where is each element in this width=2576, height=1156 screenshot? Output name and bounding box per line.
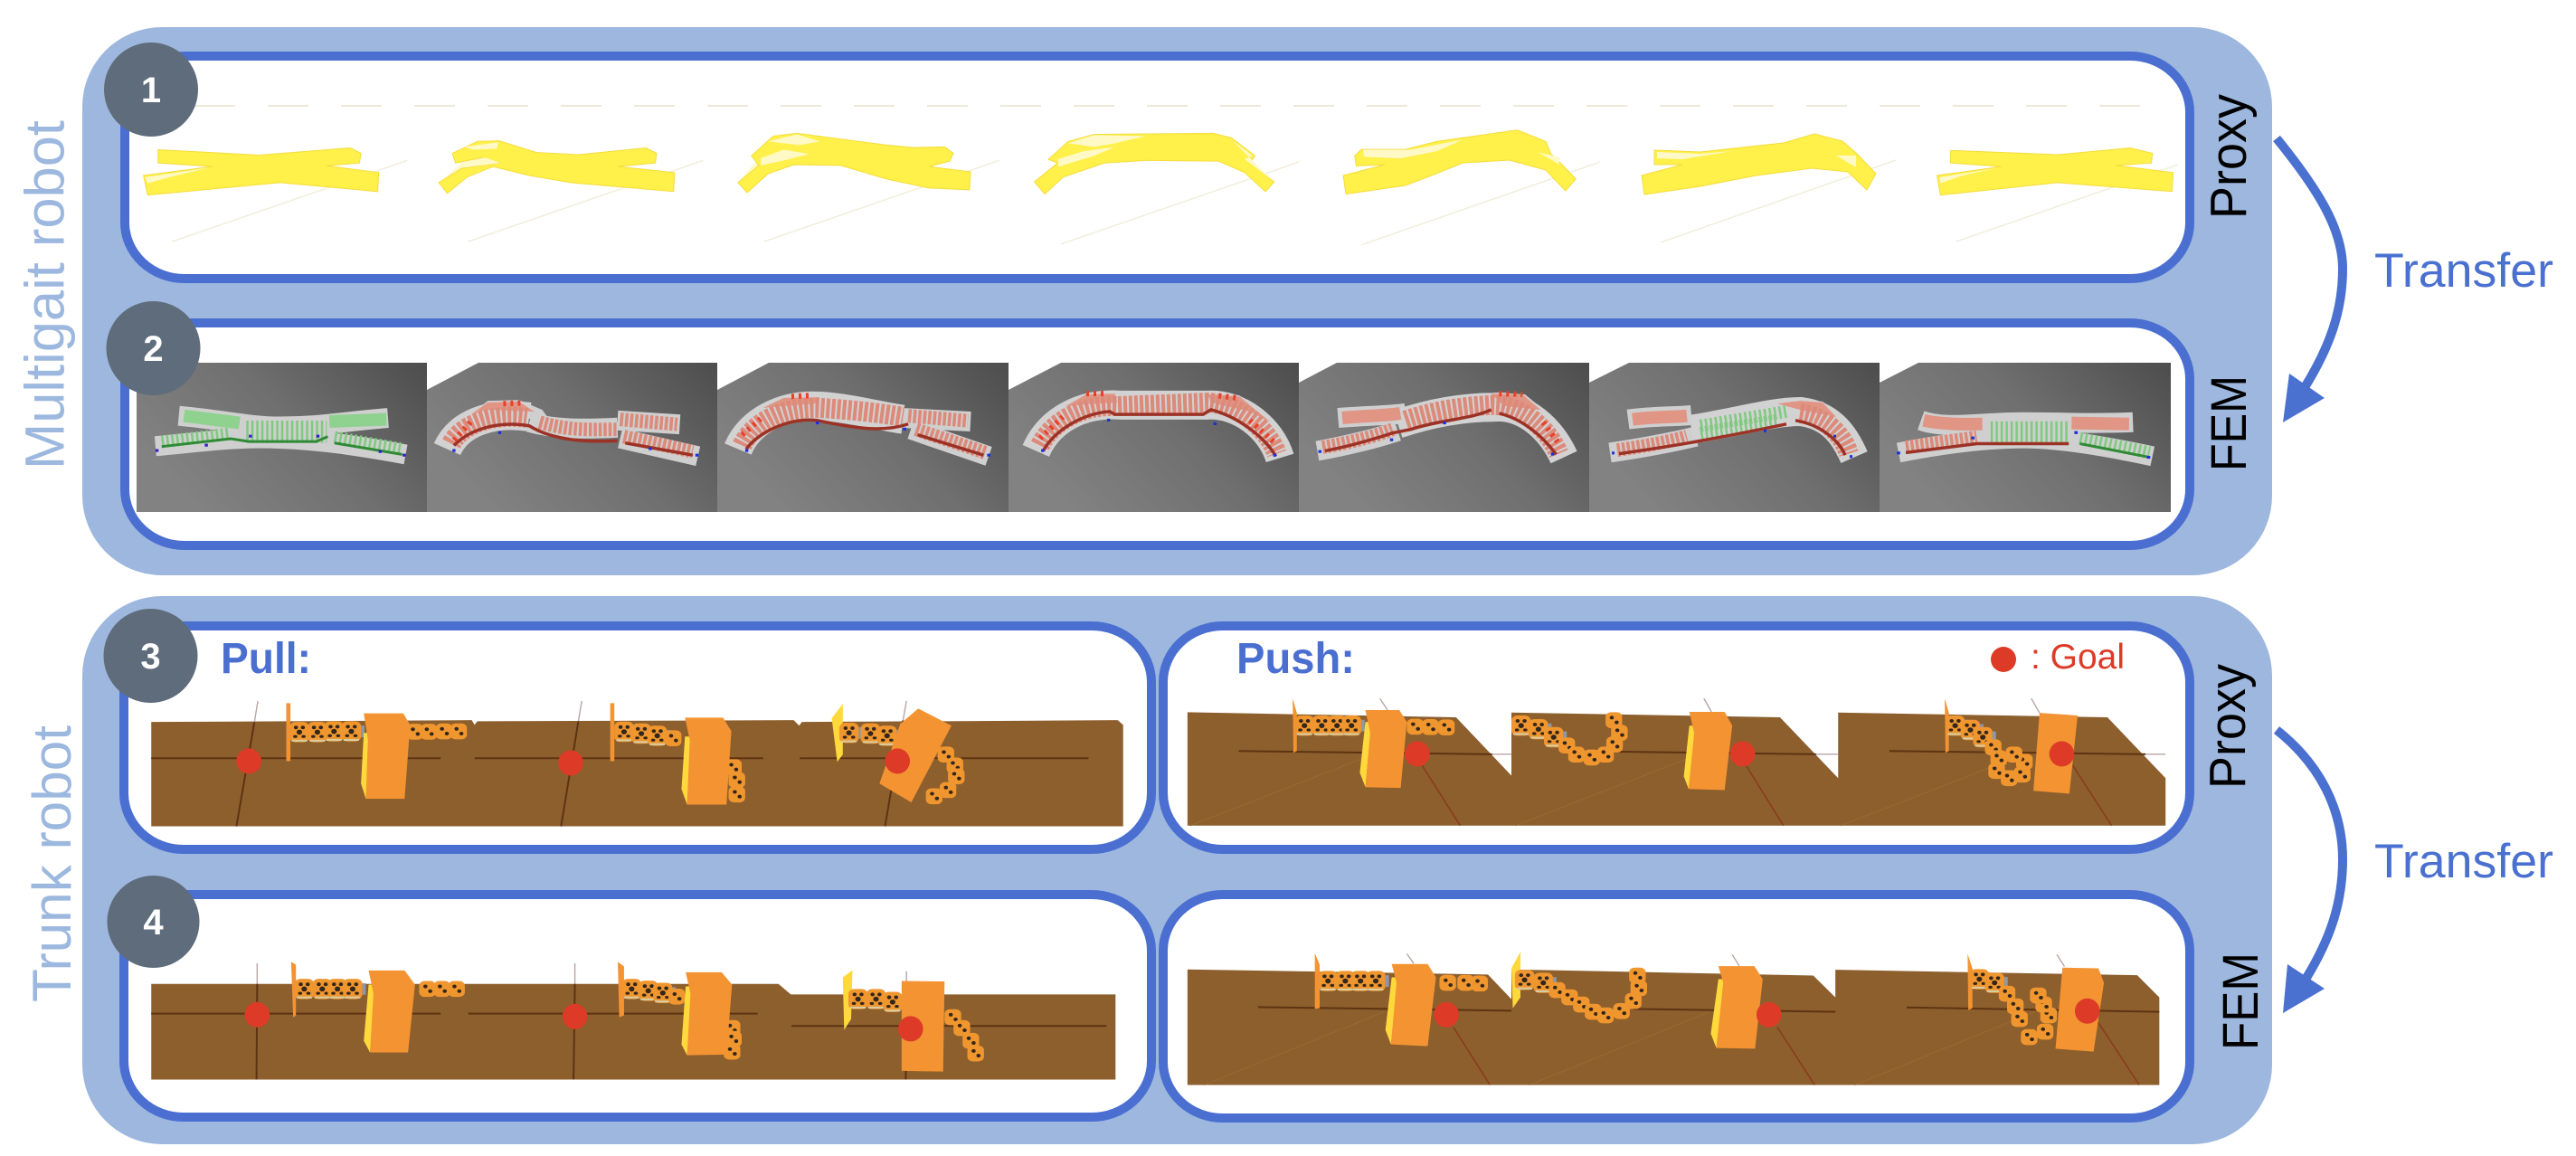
frame 5 yellow robot [1343,130,1600,245]
frame 2 FEM robot (red) [427,363,717,512]
trunk segments [286,703,964,804]
label: Proxy (trunk): Proxy [2199,664,2257,789]
panel 3: trunk proxy pull frame [124,626,1151,849]
proxy simulation: seven yellow multigait frames [144,106,2178,245]
panel 4b: trunk FEM push frame [1163,895,2190,1118]
badge 2 [107,301,201,395]
frame 6 FEM robot (mixed) [1589,363,1880,512]
goal markers [245,1002,923,1041]
orange boxes [364,971,944,1072]
panel 3 scene: proxy pull [151,701,1123,827]
arrow: transfer trunk [2277,730,2343,1013]
badge 3 [103,609,197,703]
badge 2: 2 [143,329,164,369]
panel: multigait robot background [82,27,2272,575]
frame 1 yellow robot [144,148,407,242]
goal markers [236,748,910,775]
panel 3b: trunk proxy push frame [1163,626,2190,849]
frame 4 yellow robot [1035,133,1299,244]
orange boxes [1359,710,2078,793]
badge 1: 1 [141,71,161,110]
frame 2 yellow robot [439,141,703,242]
frame 3 FEM robot (red) [717,363,1009,512]
badge 3: 3 [140,637,161,677]
frame 7 yellow robot [1937,148,2178,242]
orange boxes [361,708,952,804]
panel 4: trunk FEM pull frame [124,895,1151,1117]
label: Multigait robot: Multigait robot [14,120,76,469]
frame 6 yellow robot [1642,134,1896,242]
FEM simulation: seven grey frames [137,363,2171,512]
heading: Push: Push: [1236,635,1355,683]
badge 4 [107,876,199,968]
frame 3 yellow robot [738,133,999,242]
trunk segments [1293,698,2032,786]
label: Proxy (multigait): Proxy [2200,94,2258,219]
label: Trunk robot: Trunk robot [22,725,82,1002]
panel 3b scene: proxy push [1188,698,2165,826]
orange boxes [1386,964,2104,1052]
trunk segments [291,962,984,1061]
arrow: transfer multigait [2277,138,2343,422]
panel 2: multigait FEM frame [125,323,2190,545]
trunk segments [1315,952,2057,1045]
panel 1: multigait proxy frame [125,56,2190,279]
label: FEM (trunk): FEM [2211,952,2268,1050]
frame 4 FEM robot (red) [1009,363,1299,512]
label: FEM (multigait): FEM [2200,375,2257,471]
frame 5 FEM robot (red) [1299,363,1589,512]
label: Transfer (multigait): Transfer [2374,244,2553,298]
panel 4 scene: FEM pull [151,962,1115,1079]
badge 1 [104,43,198,137]
goal markers [1405,741,2074,766]
panel: trunk robot background [82,596,2272,1144]
goal markers [1434,999,2100,1028]
legend: goal marker: : Goal [2031,638,2125,677]
badge 4: 4 [143,903,164,943]
frame 1 FEM robot (green) [137,363,427,512]
label: Transfer (trunk): Transfer [2374,835,2553,888]
heading: Pull: Pull: [221,635,311,683]
frame 7 FEM robot (mixed) [1880,363,2171,512]
panel 4b scene: FEM push [1188,952,2159,1085]
